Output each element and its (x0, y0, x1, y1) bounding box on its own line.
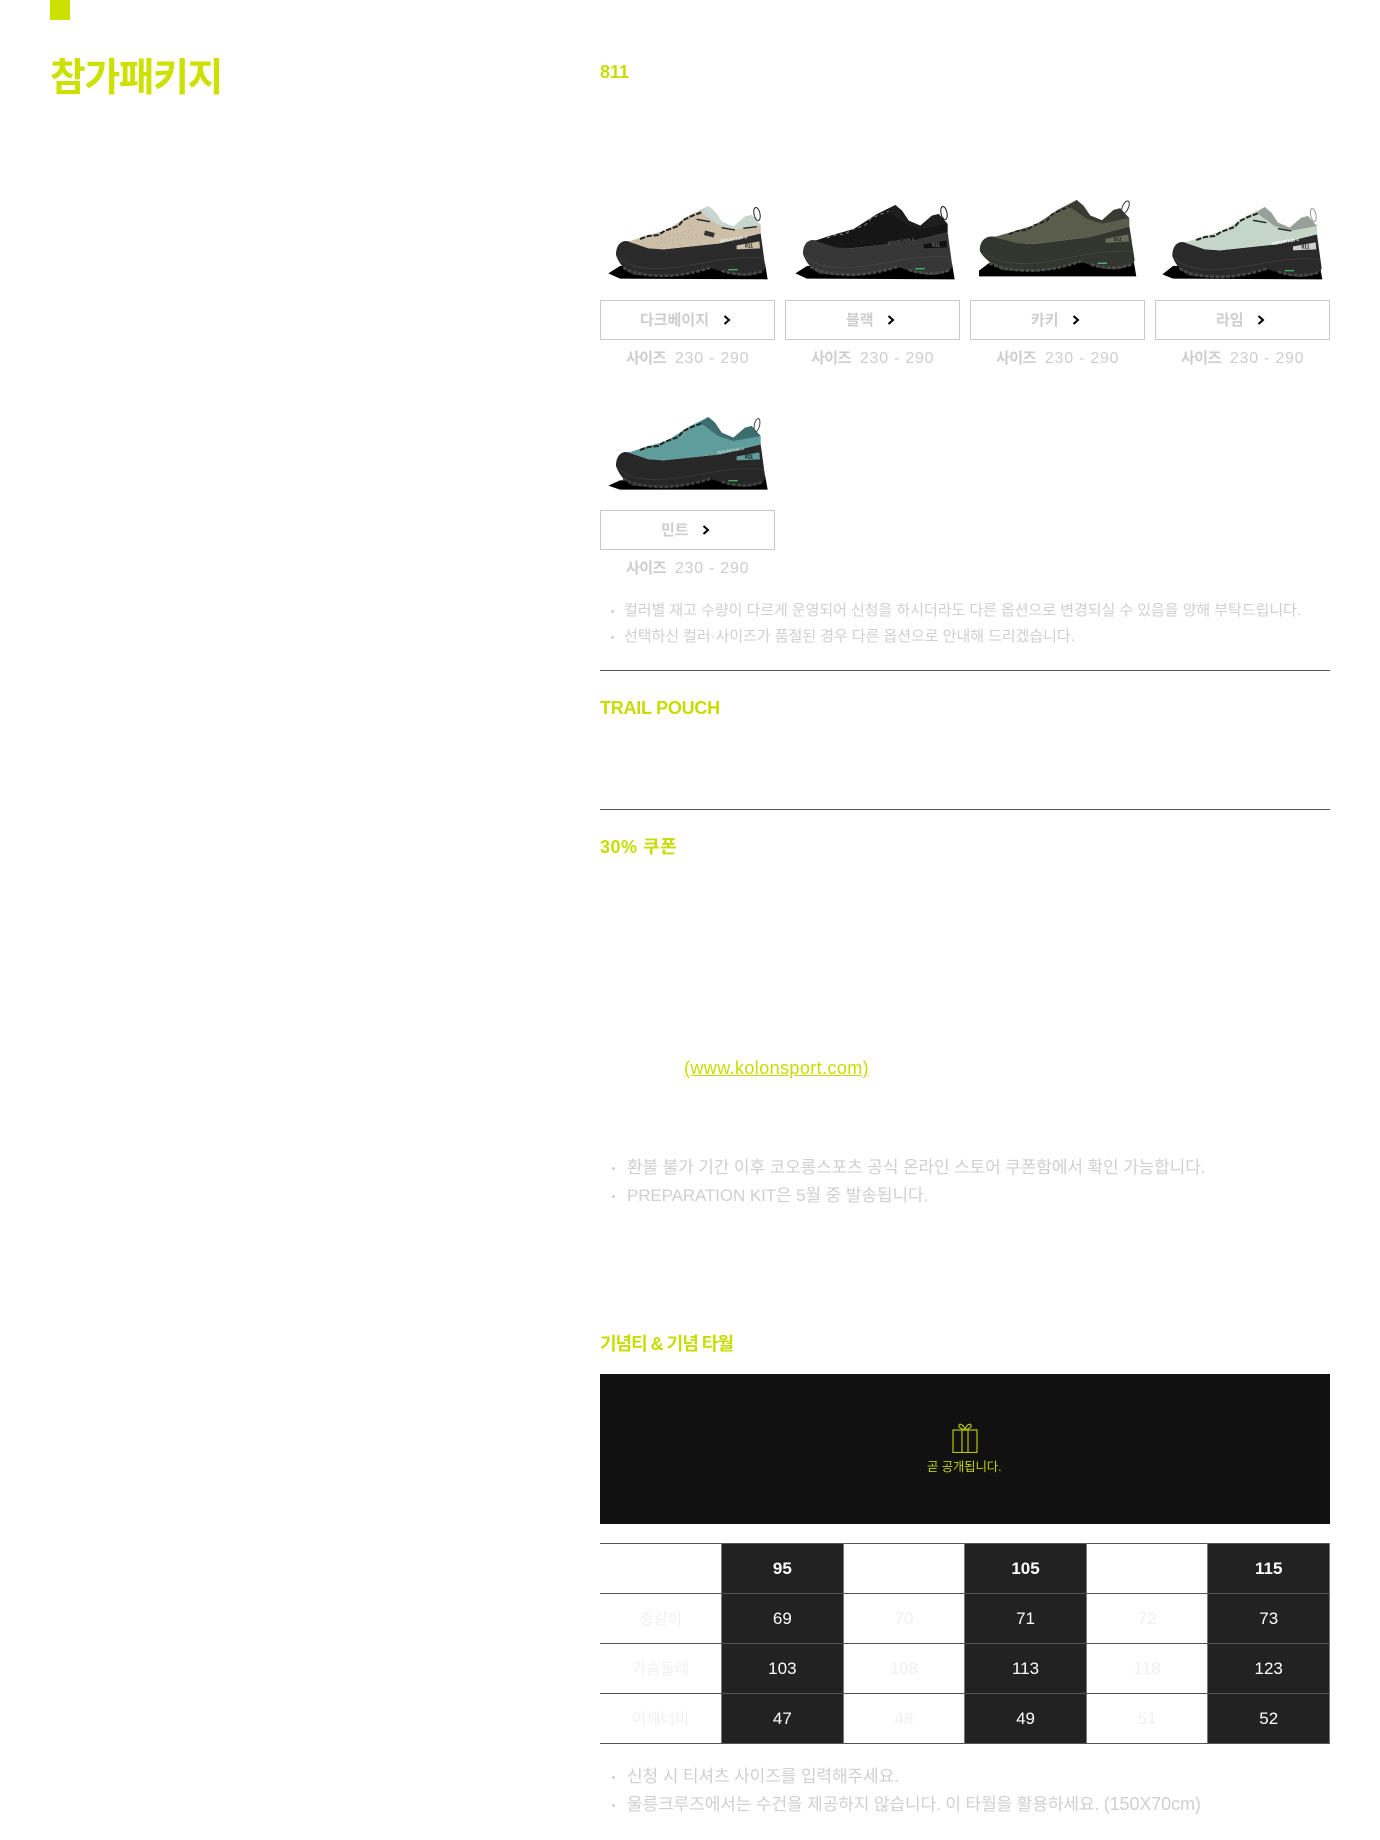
size table: 어깨너비 (632, 1711, 689, 1728)
size table: 51 (1138, 1708, 1157, 1728)
size table: 118 (1134, 1658, 1161, 1678)
color button: mint (600, 510, 775, 550)
product: mint shoe (608, 417, 768, 490)
product: mint shoe: 811 (745, 455, 753, 461)
size table: 95 (773, 1558, 792, 1578)
title: 참가패키지 (50, 57, 222, 100)
size table: 123 (1254, 1658, 1283, 1678)
color button: dark beige (600, 300, 775, 340)
color button: lime (1155, 300, 1330, 340)
link: kolonsport: (www.kolonsport.com) (684, 1058, 869, 1078)
note bullets: coupon (612, 1158, 1205, 1205)
color button: black (785, 300, 960, 340)
note bullets: towel and shirt: 울릉크루즈에서는 수건을 제공하지 않습니다. 이 타월을 활용하세요. (150X70cm) (627, 1794, 1201, 1814)
size table: 총길이 (639, 1611, 682, 1628)
coming soon text: 곧 공개됩니다. (927, 1460, 1001, 1474)
product: dark beige shoe: MOUNTAIN X (720, 234, 748, 244)
size table: 103 (768, 1658, 797, 1678)
size table: 52 (1259, 1708, 1278, 1728)
size text: 사이즈 230 - 290 (626, 560, 749, 576)
product: lime shoe (1162, 207, 1322, 280)
size table: 가슴둘레 (632, 1661, 689, 1678)
note bullets: towel and shirt (612, 1767, 1201, 1814)
size table: 71 (1016, 1608, 1035, 1628)
size table: 48 (894, 1708, 913, 1728)
product: khaki shoe: 811 (1114, 237, 1122, 243)
heading: 811: 811 (600, 62, 629, 82)
note bullets: color stock: 컬러별 재고 수량이 다르게 운영되어 신청을 하시더라도 다른 옵션으로 변경되실 수 있음을 양해 부탁드립니다. (624, 602, 1301, 618)
note bullets: coupon: 환불 불가 기간 이후 코오롱스포츠 공식 온라인 스토어 쿠폰함에서 확인 가능합니다. (627, 1158, 1205, 1177)
icon: chevron (1072, 315, 1080, 325)
panel: coming soon (600, 1374, 1330, 1524)
size text: 사이즈 230 - 290 (1181, 350, 1304, 366)
size text: 사이즈 230 - 290 (811, 350, 934, 366)
size table: 113 (1012, 1658, 1039, 1678)
note bullets: coupon: PREPARATION KIT은 5월 중 발송됩니다. (627, 1186, 928, 1205)
note bullets: color stock: 선택하신 컬러·사이즈가 품절된 경우 다른 옵션으로 안내해 드리겠습니다. (624, 628, 1075, 644)
product: lime shoe: MOUNTAIN X (1272, 237, 1300, 246)
icon: gift box (952, 1424, 978, 1453)
size table: 73 (1259, 1608, 1278, 1628)
product: lime shoe: 811 (1301, 245, 1310, 251)
color label: 라임 (1216, 312, 1244, 328)
size table: 69 (773, 1608, 792, 1628)
color button: khaki (970, 300, 1145, 340)
icon: chevron (702, 525, 710, 535)
size table: 49 (1016, 1708, 1035, 1728)
product: mint shoe: MOUNTAIN X (717, 446, 744, 455)
size text: 사이즈 230 - 290 (626, 350, 749, 366)
product: khaki shoe (979, 200, 1136, 276)
size table: 70 (894, 1608, 913, 1628)
icon: chevron (888, 315, 894, 325)
note bullets: towel and shirt: 신청 시 티셔츠 사이즈를 입력해주세요. (627, 1767, 899, 1786)
icon: chevron (724, 315, 730, 325)
product: black shoe: 811 (932, 243, 940, 249)
size table: 105 (1011, 1558, 1040, 1578)
color label: 카키 (1031, 312, 1059, 328)
icon: chevron (1258, 315, 1264, 325)
product: dark beige shoe (608, 206, 768, 280)
product: black shoe (795, 205, 955, 280)
size table: 72 (1138, 1608, 1157, 1628)
size table (600, 1543, 1330, 1744)
heading: 30% coupon: 30% 쿠폰 (600, 837, 677, 857)
size text: 사이즈 230 - 290 (996, 350, 1119, 366)
size table: 115 (1255, 1558, 1282, 1578)
size table: 47 (773, 1708, 792, 1728)
heading: commemorative tee and towel: 기념티 & 기념 타월 (600, 1334, 733, 1354)
product: dark beige shoe: 811 (745, 244, 753, 250)
note bullets: color stock (611, 602, 1301, 644)
color label: 다크베이지 (640, 312, 709, 328)
color label: 블랙 (846, 312, 874, 328)
accent block (50, 0, 70, 20)
product: black shoe: MOUNTAIN X (887, 237, 915, 245)
heading: trail pouch: TRAIL POUCH (600, 698, 720, 718)
color label: 민트 (661, 522, 689, 538)
size table: 108 (890, 1658, 918, 1678)
